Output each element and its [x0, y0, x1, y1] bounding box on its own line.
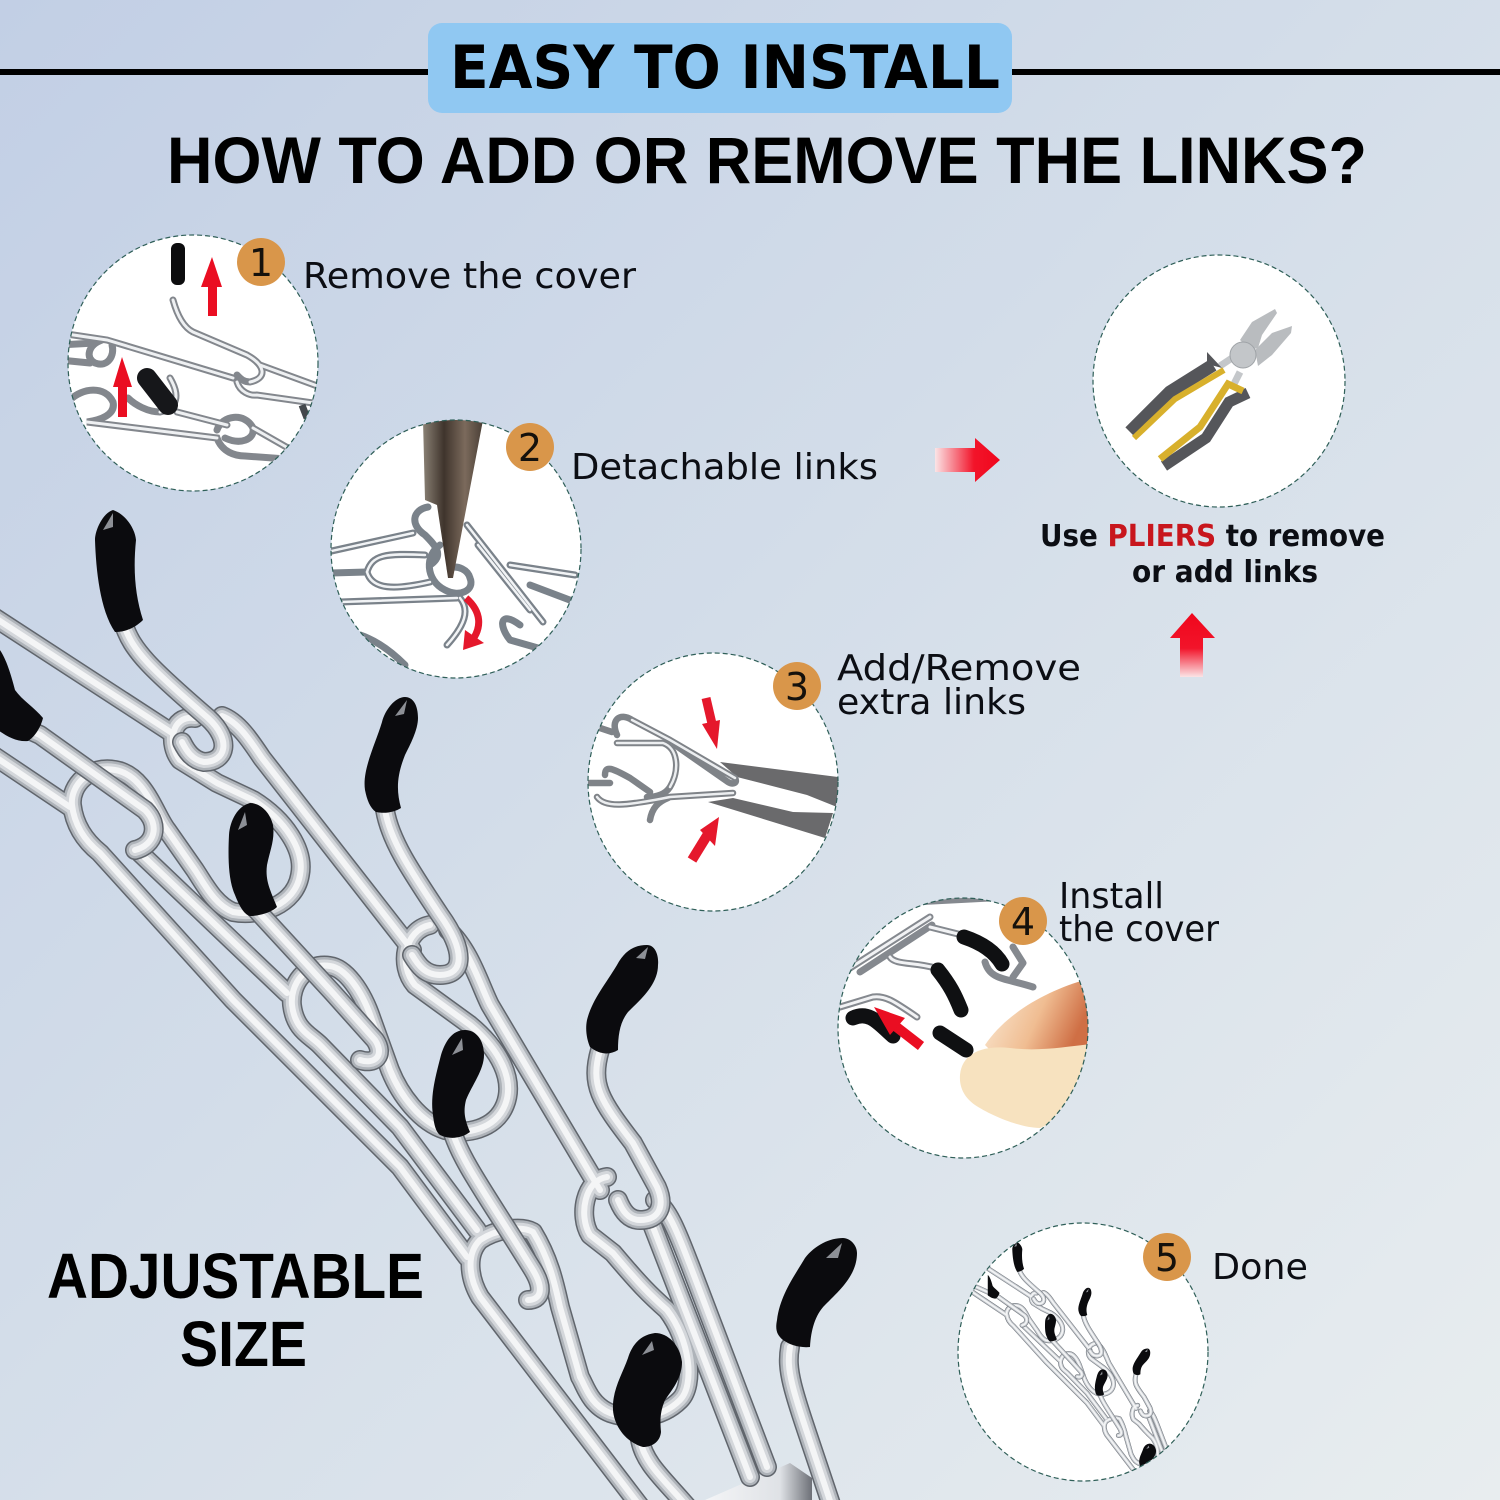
step 3 circle photo: [588, 653, 838, 911]
pliers circle: [1093, 255, 1345, 507]
title pill: easy to install: EASY TO INSTALL: [450, 33, 1000, 103]
step 3 circle outline: [588, 653, 838, 911]
red arrow: [874, 1007, 921, 1046]
red arrow down: [702, 698, 720, 749]
step 4 circle outline: [838, 898, 1088, 1158]
chain photo: [0, 510, 857, 1500]
step 5 badge: [1143, 1233, 1191, 1281]
step 2 text: Detachable links: [571, 447, 878, 488]
step 3 text: extra links: [837, 682, 1026, 723]
red arrow up bottom: [113, 357, 132, 417]
step 1 badge: [237, 238, 285, 286]
step 3 text: [837, 648, 1081, 723]
pliers caption: Use PLIERS to remove: [1040, 519, 1385, 554]
pliers panel: [1040, 255, 1385, 590]
step 5 text: Done: [1212, 1247, 1308, 1288]
tapered tool tip: [423, 420, 483, 578]
step 3 panel: [588, 648, 1081, 911]
step 1 text: Remove the cover: [303, 256, 636, 297]
step 4 badge: [999, 897, 1047, 945]
adjustable size label: ADJUSTABLE: [47, 1240, 424, 1312]
installed cover: [147, 378, 168, 405]
step 3 badge: [773, 662, 821, 710]
step 2 badge: 2: [518, 426, 542, 470]
hand: [960, 978, 1092, 1128]
step 4 circle photo: [838, 898, 1092, 1158]
arrow up toward caption: [1170, 613, 1215, 677]
pliers caption: [1040, 519, 1385, 590]
step 2 panel: [327, 420, 878, 678]
header rule: [0, 69, 1500, 75]
red arrow up top: [201, 257, 222, 316]
step 1 badge: 1: [249, 241, 273, 285]
pliers caption: or add links: [1132, 555, 1318, 590]
adjustable size label: [47, 1240, 424, 1380]
step 4 badge: 4: [1011, 900, 1035, 944]
step 4 panel: [838, 876, 1219, 1158]
step 1 circle photo: [60, 235, 320, 491]
step 2 circle outline: [331, 420, 581, 678]
arrow toward pliers: [935, 438, 1000, 482]
heading: how to add or remove the links: HOW TO ADD OR REMOVE THE LINKS?: [167, 123, 1367, 197]
step 5 badge: 5: [1155, 1236, 1179, 1280]
adjustable size label: SIZE: [180, 1308, 307, 1380]
step 3 badge: 3: [785, 665, 809, 709]
small cover at edge: [302, 405, 307, 418]
icon: pliers: [1130, 309, 1292, 466]
step 4 text: Install: [1059, 876, 1164, 917]
step 2 circle photo: [327, 420, 581, 678]
step 3 text: Add/Remove: [837, 648, 1081, 689]
red arrow up: [692, 817, 719, 860]
step 5 circle outline: [958, 1223, 1208, 1481]
step 4 text: the cover: [1059, 909, 1219, 950]
removed cover: [171, 243, 185, 285]
step 1 circle outline: [68, 235, 318, 491]
red curved arrow: [463, 598, 484, 650]
plier jaws: [708, 762, 838, 838]
step 5 circle photo: [955, 1223, 1208, 1487]
black covers: [853, 937, 1002, 1050]
step 1 panel: [60, 235, 636, 491]
step 4 text: [1059, 876, 1219, 950]
step 2 badge: [506, 423, 554, 471]
step 5 panel: [955, 1223, 1308, 1487]
